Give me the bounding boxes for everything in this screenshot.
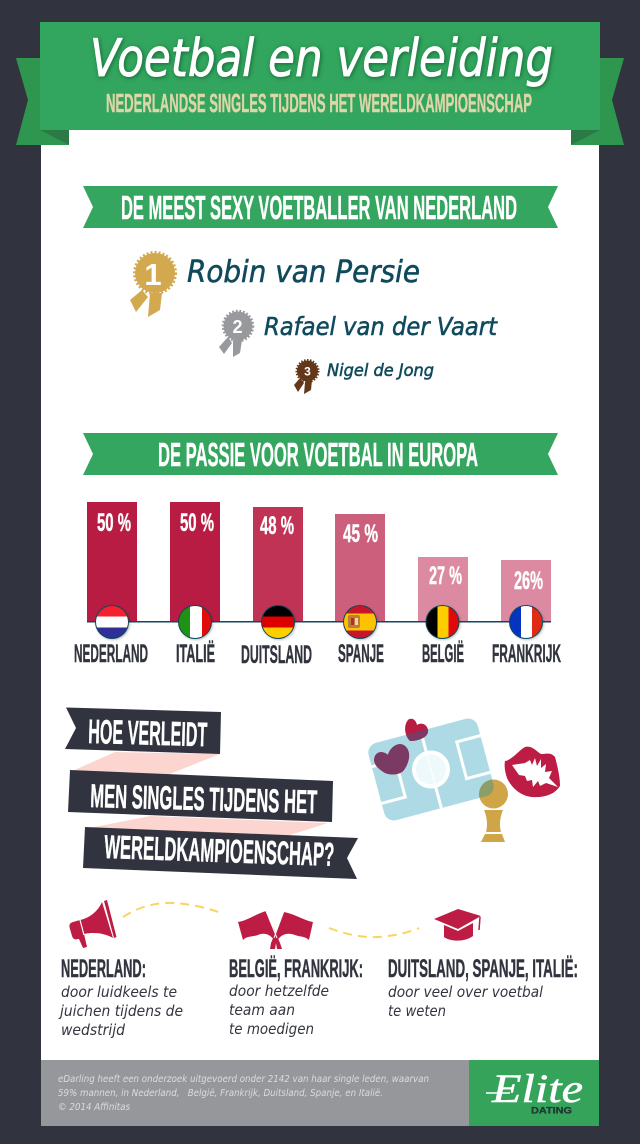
icon: pitch — [366, 716, 496, 823]
country labels: SPANJE — [338, 640, 384, 668]
bar: Spanje — [335, 514, 385, 622]
icon: trophy — [479, 780, 508, 842]
medal 2 — [219, 311, 253, 357]
flag: Italië — [178, 605, 212, 639]
medal 3: 3 — [304, 364, 311, 378]
medal 1 — [130, 252, 176, 317]
country labels — [74, 640, 561, 669]
text block: Nederland: wedstrijd — [61, 1021, 125, 1039]
text block: België, Frankrijk: door hetzelfde — [229, 982, 329, 1000]
text block: Nederland — [58, 955, 183, 1039]
bar: Nederland: 50 % — [97, 509, 131, 537]
section heading: passion — [83, 433, 558, 475]
icon: lips — [505, 747, 560, 797]
icon: small heart — [405, 719, 428, 741]
bar: Frankrijk: 26% — [514, 567, 543, 595]
footer — [41, 1060, 599, 1126]
text block: Nederland: juichen tijdens de — [58, 1002, 183, 1020]
text block: België, Frankrijk: team aan — [229, 1001, 295, 1019]
chart baseline — [87, 621, 551, 622]
icon: crossed flags — [238, 911, 313, 949]
bar: Nederland — [87, 502, 137, 622]
text block: Nederland: door luidkeels te — [61, 983, 177, 1001]
flag: Duitsland — [261, 605, 295, 640]
footer note: eDarling heeft een onderzoek uitgevoerd onder 2142 van haar single leden, waarvan — [58, 1074, 429, 1085]
icon: graduation cap — [434, 909, 481, 941]
text block: Duitsland, Spanje, Italië — [388, 955, 578, 1020]
text block: België, Frankrijk: te moedigen — [229, 1020, 314, 1038]
illustration: football pitch, hearts, trophy, lips — [366, 716, 560, 842]
bar: Frankrijk — [501, 560, 551, 622]
flag: België — [426, 605, 460, 639]
flag: Frankrijk — [509, 605, 543, 639]
footer note: 59% mannen, in Nederland, België, Frankrijk, Duitsland, Spanje, en Italië. — [58, 1088, 383, 1099]
bar: België — [418, 557, 468, 622]
text block: België, Frankrijk: BELGIË, FRANKRIJK: — [229, 955, 363, 983]
icon: large heart — [374, 744, 409, 774]
bar: Italië: 50 % — [180, 509, 214, 537]
slanted question banner: HOE VERLEIDT — [88, 713, 208, 754]
logo: Elite — [491, 1066, 583, 1111]
name 1: Robin van Persie — [187, 255, 420, 290]
flag: Nederland — [95, 605, 129, 640]
slanted question banner: MEN SINGLES TIJDENS HET — [90, 777, 318, 820]
bar: Duitsland: 48 % — [260, 512, 294, 540]
name 3: Nigel de Jong — [327, 361, 434, 381]
country labels: DUITSLAND — [241, 641, 312, 669]
bar: Duitsland — [253, 507, 303, 622]
medal 2: 2 — [232, 317, 243, 337]
text block: België, Frankrijk — [229, 955, 363, 1038]
flag: Spanje — [343, 605, 377, 639]
country labels: ITALIË — [176, 640, 215, 668]
header ribbon — [16, 22, 624, 145]
slanted question banner — [65, 708, 358, 879]
name 2: Rafael van der Vaart — [264, 312, 498, 341]
footer note — [58, 1074, 429, 1113]
bar chart — [74, 502, 561, 669]
country labels: NEDERLAND — [74, 640, 148, 668]
white content panel — [41, 100, 599, 1060]
medal 3 — [294, 360, 318, 394]
text block: Duitsland, Spanje, Italië: te weten — [388, 1002, 446, 1020]
dashed path 1 — [123, 903, 221, 917]
text: FRANKRIJK — [492, 640, 561, 668]
text block: Duitsland, Spanje, Italië: door veel over voetbal — [388, 983, 544, 1001]
country labels: BELGIË — [422, 640, 464, 668]
slanted question banner: WERELDKAMPIOENSCHAP? — [104, 828, 335, 873]
footer note: © 2014 Affinitas — [58, 1102, 130, 1113]
icon: megaphone — [69, 900, 116, 948]
bar: Spanje: 45 % — [343, 520, 378, 548]
title: Voetbal en verleiding — [90, 29, 553, 89]
bar: België: 27 % — [429, 562, 462, 590]
text block: Nederland: NEDERLAND: — [61, 955, 146, 983]
bar: Italië — [170, 502, 220, 622]
medal 1: 1 — [144, 257, 162, 292]
logo: DATING — [531, 1106, 572, 1116]
dashed path 2 — [329, 928, 419, 937]
